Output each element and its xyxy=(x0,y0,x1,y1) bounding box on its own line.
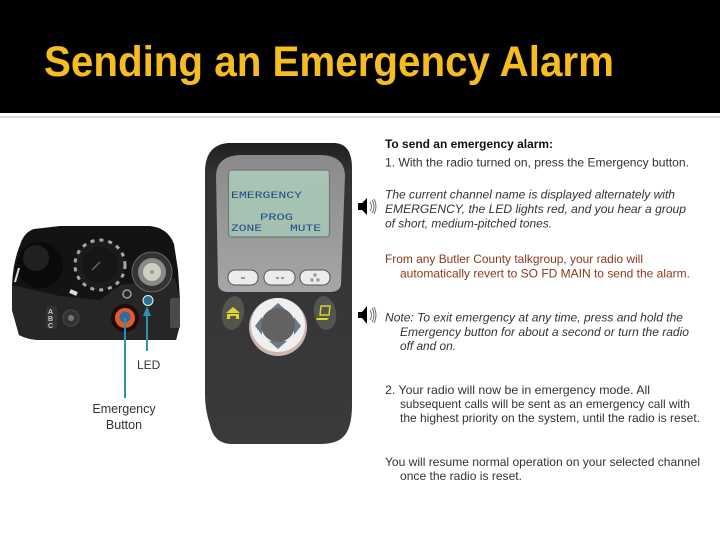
Butler County note xyxy=(385,252,690,280)
small round key xyxy=(123,290,131,298)
emergency button xyxy=(111,304,139,332)
LED pointer arrow xyxy=(143,306,151,351)
closing note: You will resume normal operation on your selected channel xyxy=(385,455,700,469)
Butler County note: automatically revert to SO FD MAIN to send the alarm. xyxy=(400,266,690,280)
exit note: Note: To exit emergency at any time, press and hold the xyxy=(385,312,683,324)
screen text: EMERGENCY xyxy=(231,190,303,202)
soft buttons xyxy=(228,270,330,285)
italic description xyxy=(385,190,687,230)
exit note xyxy=(385,312,690,353)
side latch xyxy=(170,298,180,328)
Butler County note: From any Butler County talkgroup, your radio will xyxy=(385,252,643,266)
screen text: ZONE xyxy=(231,223,262,235)
step 2 xyxy=(385,383,700,425)
lower body band xyxy=(12,278,180,340)
radio front illustration xyxy=(205,143,352,444)
italic description: of short, medium-pitched tones. xyxy=(385,218,552,230)
Emergency button pointer line xyxy=(124,318,126,398)
icon: speaker bottom xyxy=(358,306,376,324)
navigation pad xyxy=(249,298,307,356)
LED xyxy=(143,296,153,306)
volume knob xyxy=(75,240,125,290)
radio top illustration: B xyxy=(48,316,53,323)
screen text xyxy=(231,190,321,235)
icon: speaker top xyxy=(358,198,376,215)
home key xyxy=(219,294,247,332)
radio top illustration: C xyxy=(48,323,53,330)
connector xyxy=(63,310,79,326)
radio top illustration xyxy=(12,226,180,340)
step 2: the highest priority on the system, until the radio is reset. xyxy=(400,411,700,425)
step 2: subsequent calls will be sent as an emergency call with xyxy=(400,397,690,411)
top body xyxy=(12,226,180,340)
LCD screen xyxy=(228,170,330,237)
italic description: The current channel name is displayed alternately with xyxy=(385,190,675,202)
radio body xyxy=(205,143,352,444)
antenna connector xyxy=(132,252,172,292)
grey faceplate xyxy=(216,155,345,292)
screen text: PROG xyxy=(260,212,293,224)
label: Emergency Button: Button xyxy=(106,418,142,432)
title: Sending an Emergency Alarm xyxy=(44,38,614,86)
italic description: EMERGENCY, the LED lights red, and you hear a group xyxy=(385,204,687,216)
label: Emergency Button xyxy=(92,402,156,432)
step 1: 1. With the radio turned on, press the Emergency button. xyxy=(385,156,689,170)
radio top illustration: A xyxy=(48,309,53,316)
exit note: Emergency button for about a second or turn the radio xyxy=(400,327,690,339)
header band xyxy=(0,0,720,118)
ABC label xyxy=(46,306,57,329)
exit note: off and on. xyxy=(400,341,456,353)
menu key xyxy=(311,294,339,332)
label: Emergency Button: Emergency xyxy=(92,402,156,416)
left knob xyxy=(17,242,63,288)
instruction heading: To send an emergency alarm: xyxy=(385,139,553,151)
step 2: 2. Your radio will now be in emergency mode. All xyxy=(385,383,650,397)
closing note xyxy=(385,455,700,483)
closing note: once the radio is reset. xyxy=(400,469,522,483)
label: LED: LED xyxy=(137,358,161,372)
screen text: MUTE xyxy=(290,223,321,235)
